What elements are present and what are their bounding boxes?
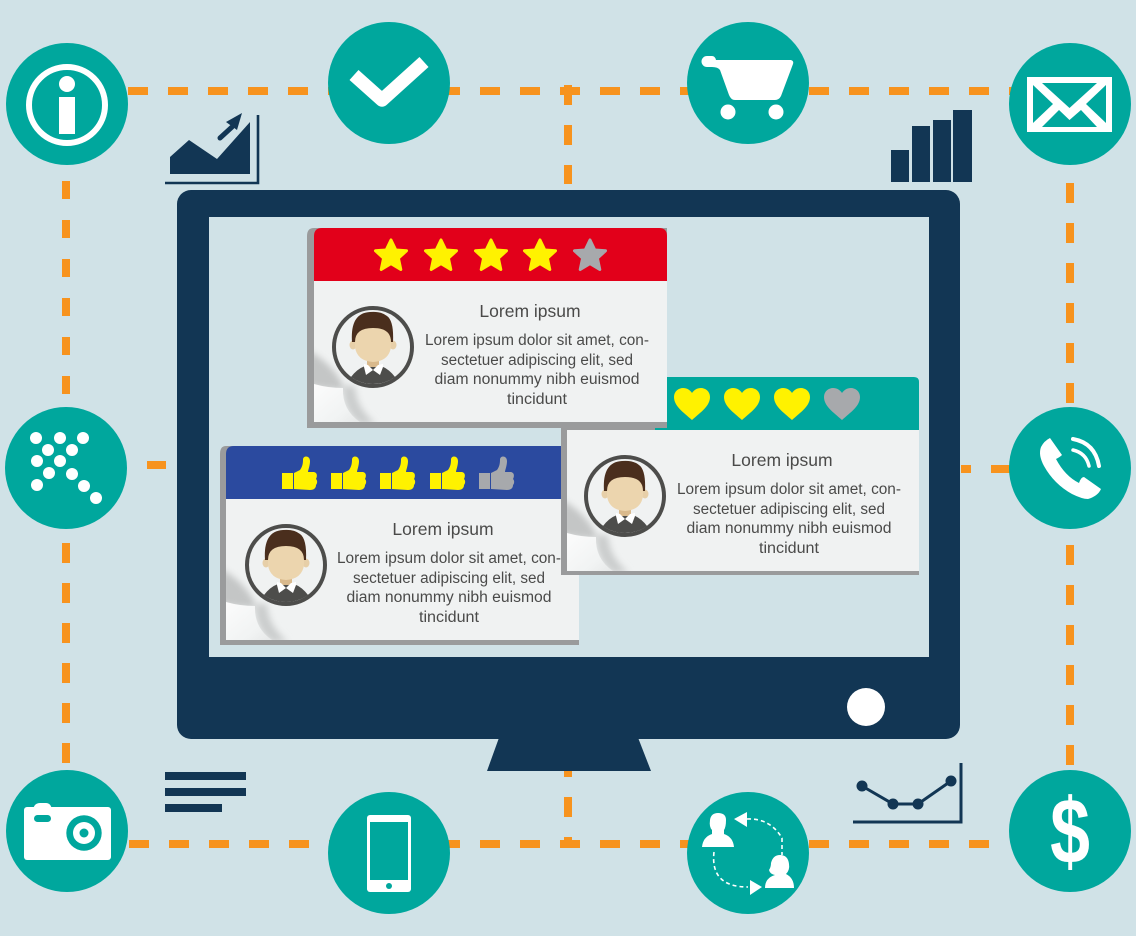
hearts rating	[674, 388, 860, 420]
review text: sectetuer adipiscing elit, sed	[441, 352, 633, 369]
avatar	[334, 308, 412, 386]
curled page corner	[561, 499, 629, 573]
monitor	[177, 190, 960, 771]
review text: tincidunt	[759, 540, 820, 557]
icon: line chart	[853, 763, 961, 822]
avatar	[247, 526, 325, 604]
review text: Lorem ipsum	[479, 301, 581, 321]
icon: dollar sign	[1009, 770, 1131, 892]
review text: tincidunt	[507, 391, 568, 408]
panel: heart review card	[561, 377, 919, 575]
icon: shopping cart	[687, 22, 809, 144]
icon: camera	[6, 770, 128, 892]
icon: bar chart	[891, 110, 972, 182]
thumbs rating	[282, 457, 514, 490]
icon: smartphone	[328, 792, 450, 914]
review text: diam nonummy nibh euismod	[434, 371, 640, 388]
icon: envelope	[1009, 43, 1131, 165]
avatar	[586, 457, 664, 535]
review text	[425, 301, 649, 408]
icon: text lines	[165, 772, 246, 812]
review text: diam nonummy nibh euismod	[346, 589, 552, 606]
review text: sectetuer adipiscing elit, sed	[693, 501, 885, 518]
review text: tincidunt	[419, 609, 480, 626]
curled page corner	[308, 350, 376, 424]
icon: dots	[5, 407, 127, 529]
icon: information	[6, 43, 128, 165]
icon: check mark	[328, 22, 450, 144]
stars rating	[376, 240, 606, 270]
icon: dollar sign: $	[1050, 779, 1090, 883]
icon: growth chart	[165, 113, 258, 183]
review text: diam nonummy nibh euismod	[686, 520, 892, 537]
review text: sectetuer adipiscing elit, sed	[353, 570, 545, 587]
dashed connector network	[66, 85, 1070, 848]
panel: thumbs review card	[220, 446, 579, 645]
curled page corner	[220, 568, 288, 642]
icon: people exchange	[687, 792, 809, 914]
review text: Lorem ipsum dolor sit amet, con-	[425, 332, 649, 349]
panel: star review card	[307, 228, 667, 428]
review text	[677, 450, 901, 557]
review text	[337, 519, 561, 626]
icon: telephone	[1009, 407, 1131, 529]
review text: Lorem ipsum	[392, 519, 494, 539]
review text: Lorem ipsum dolor sit amet, con-	[337, 550, 561, 567]
review text: Lorem ipsum dolor sit amet, con-	[677, 481, 901, 498]
review text: Lorem ipsum	[731, 450, 833, 470]
